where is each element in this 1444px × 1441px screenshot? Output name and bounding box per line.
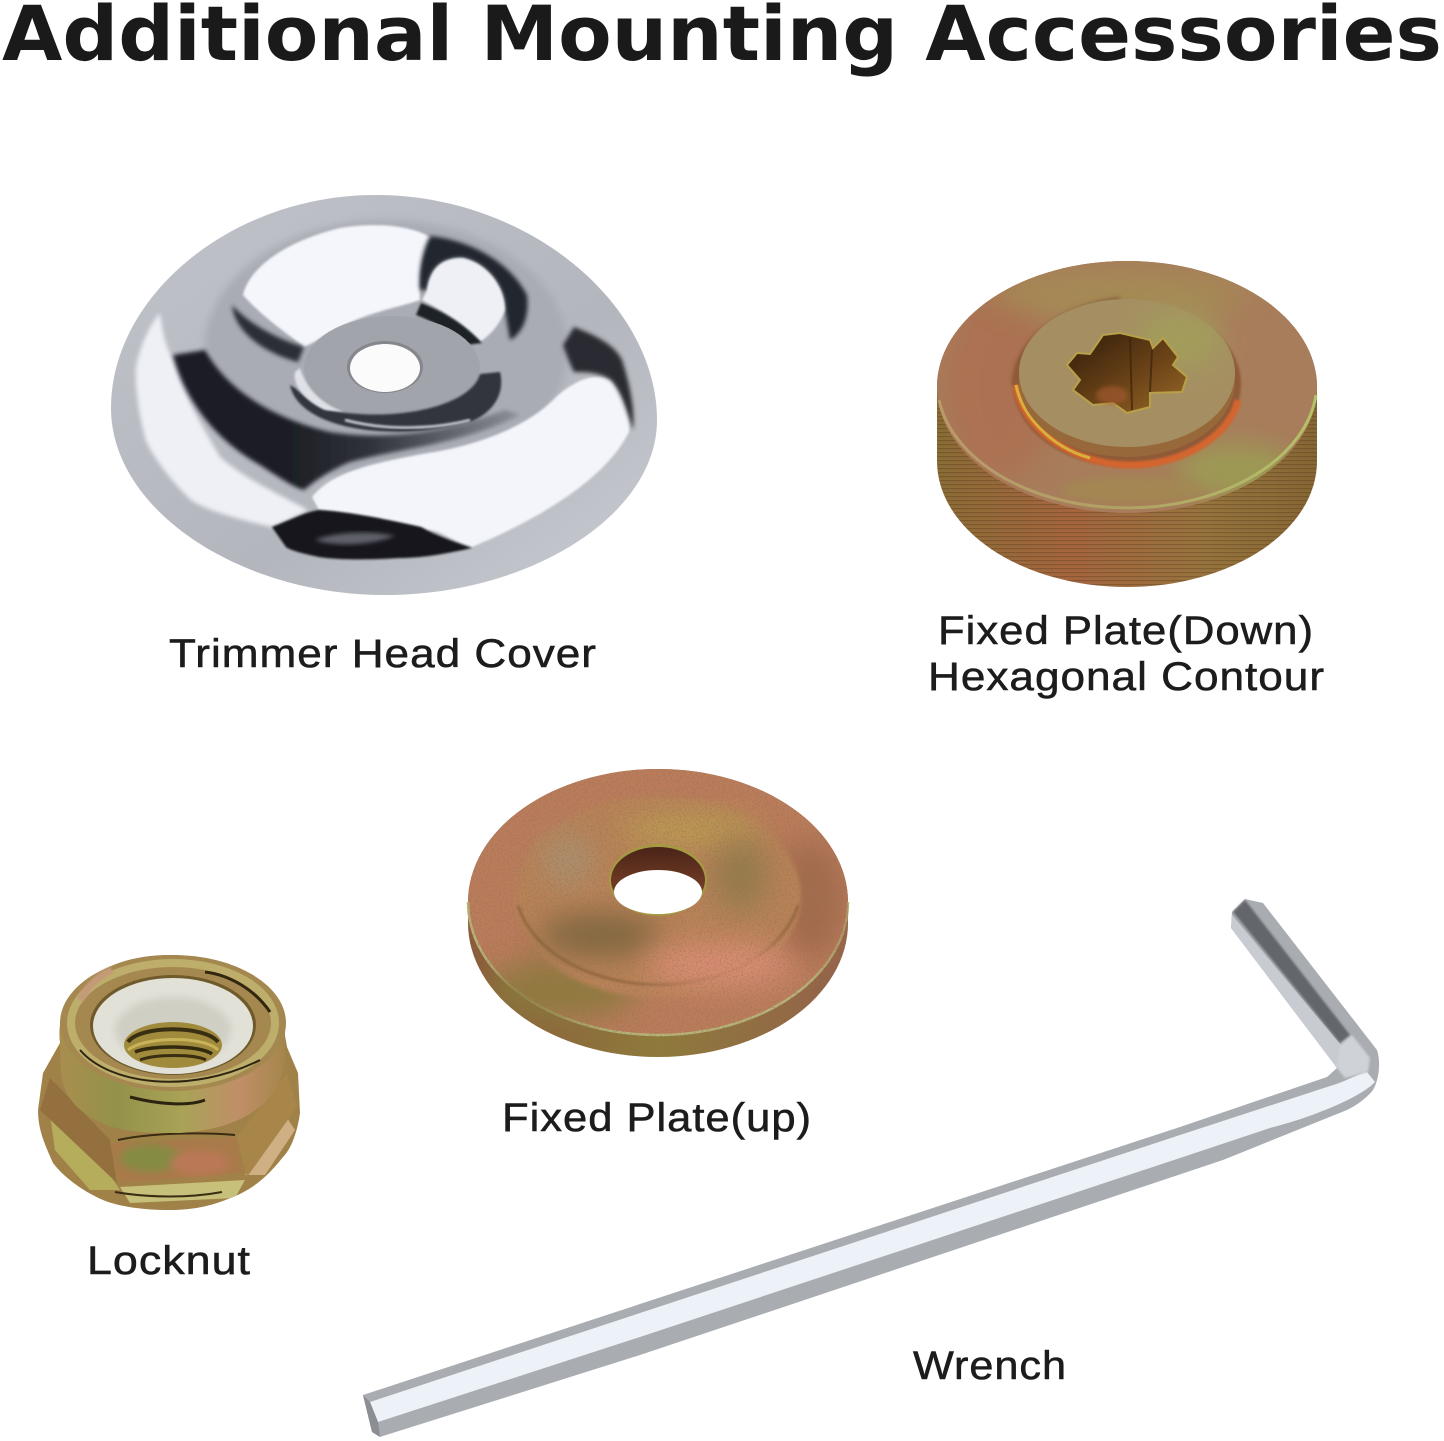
fixed plate up part	[468, 769, 848, 1057]
inner bowl	[515, 796, 801, 998]
label: fixed plate down: Fixed Plate(Down)	[938, 609, 1314, 653]
wrench bend highlight	[1337, 1035, 1370, 1078]
fixed plate down part	[937, 261, 1317, 587]
label: wrench: Wrench	[913, 1344, 1067, 1388]
label: locknut: Locknut	[87, 1239, 251, 1283]
splined hole	[1067, 333, 1187, 413]
wrench light band on short arm	[1231, 915, 1345, 1068]
hex faces	[40, 1073, 297, 1183]
center hole	[609, 844, 707, 916]
label: fixed plate down	[928, 609, 1325, 699]
locknut part	[38, 955, 300, 1210]
wrench end cap	[363, 1395, 380, 1437]
center hole	[347, 341, 423, 393]
thread hole	[124, 1022, 222, 1068]
wrench part	[363, 899, 1379, 1437]
label: trimmer head cover: Trimmer Head Cover	[169, 632, 597, 676]
label: fixed plate up: Fixed Plate(up)	[502, 1096, 812, 1140]
wrench silhouette	[363, 899, 1379, 1437]
label: fixed plate down: Hexagonal Contour	[928, 655, 1325, 699]
copper groove	[1012, 297, 1241, 467]
collar ring	[60, 955, 286, 1133]
trimmer head cover part	[111, 195, 657, 595]
wrench bright strip	[370, 1072, 1375, 1422]
wrench dark face on short arm	[1233, 900, 1350, 1043]
